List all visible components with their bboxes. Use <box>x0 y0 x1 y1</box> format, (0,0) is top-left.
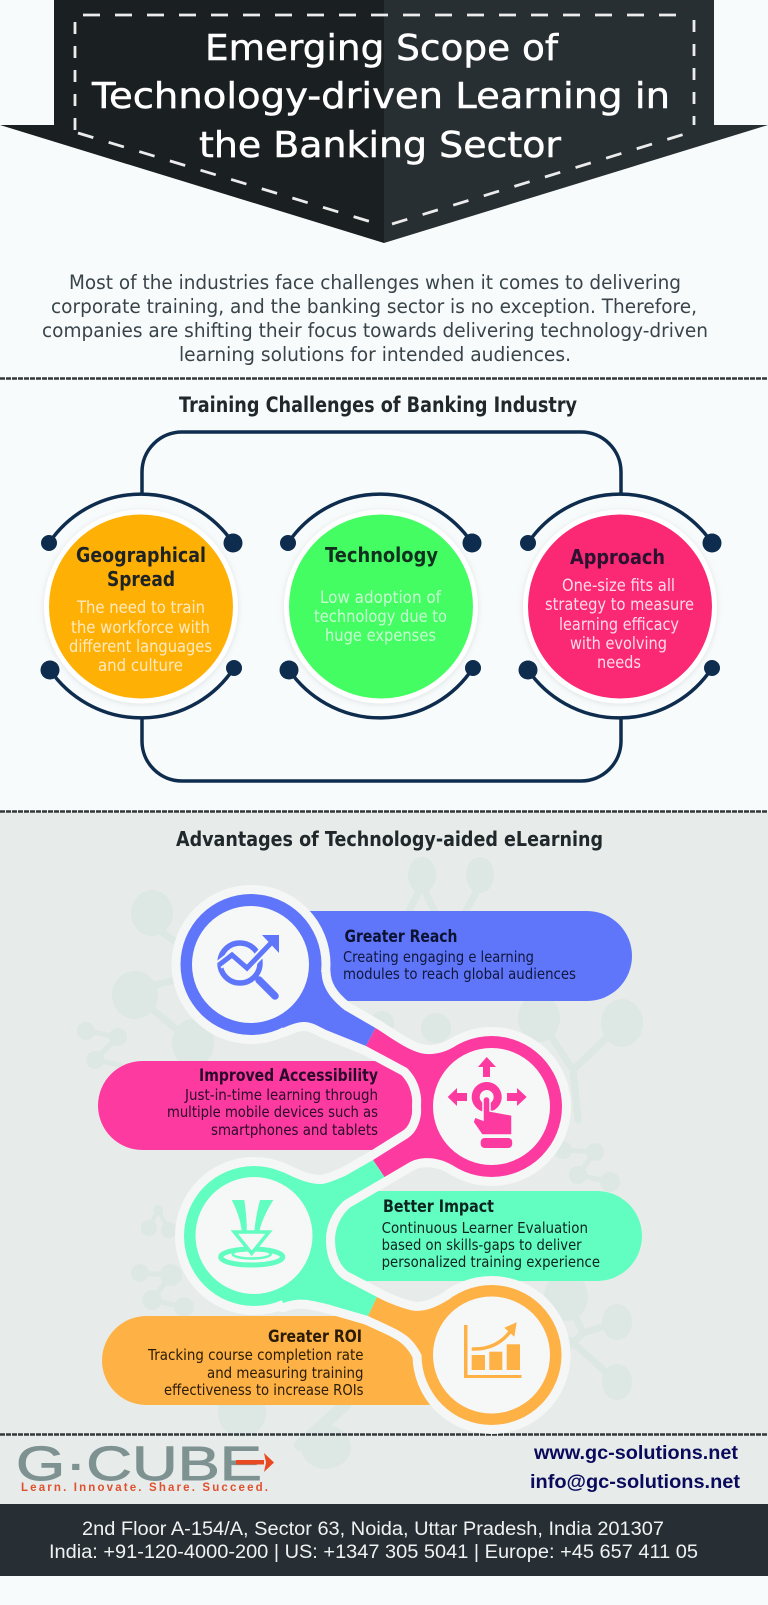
text: better impact: Better Impact <box>383 1197 494 1217</box>
text: technology: huge expenses <box>325 626 436 645</box>
text: better impact: based on skills-gaps to deliver <box>382 1236 582 1254</box>
node: greater reach <box>180 894 376 1046</box>
title text: the Banking Sector <box>199 125 561 166</box>
icon: red arrow <box>236 1453 274 1472</box>
text: geographical spread: The need to train <box>76 598 205 617</box>
text: geographical spread: and culture <box>98 656 183 675</box>
connector halo <box>180 894 562 1425</box>
text: approach: needs <box>597 653 641 672</box>
text: greater roi: and measuring training <box>207 1364 364 1382</box>
logo: G-Cube: G·CUBE <box>16 1438 262 1491</box>
text: greater reach <box>343 927 576 983</box>
advantage pills <box>98 911 642 1405</box>
text: approach: One-size fits all <box>562 576 675 595</box>
heading: training challenges: Training Challenges of Banking Industry <box>179 393 577 417</box>
panel: advantages background <box>0 812 768 1504</box>
text: approach: learning efficacy <box>559 615 679 634</box>
icon: arrow hitting target <box>221 1200 283 1265</box>
footer band <box>0 1504 768 1576</box>
title text <box>91 28 670 166</box>
text: improved accessibility: Improved Accessibility <box>199 1066 378 1086</box>
text: approach: Approach <box>570 545 665 569</box>
text: improved accessibility: multiple mobile devices such as <box>167 1103 378 1121</box>
node: improved accessibility <box>366 1028 562 1177</box>
icon: bar chart with arrow <box>464 1322 522 1378</box>
text: better impact: Continuous Learner Evaluation <box>382 1219 588 1237</box>
logo tagline: Learn. Innovate. Share. Succeed. <box>21 1482 268 1494</box>
text: greater reach: Greater Reach <box>344 927 458 947</box>
intro paragraph: Most of the industries face challenges when it comes to delivering <box>69 271 681 294</box>
title text: Technology-driven Learning in <box>91 76 670 117</box>
text: improved accessibility: Just-in-time learning through <box>184 1086 378 1104</box>
text: greater reach: Creating engaging e learning <box>343 948 534 966</box>
intro paragraph: learning solutions for intended audiences. <box>179 343 571 366</box>
text: approach: strategy to measure <box>545 595 694 614</box>
icon: magnifier with rising arrow <box>219 935 279 996</box>
title banner <box>0 0 768 243</box>
text: geographical spread <box>69 543 212 675</box>
footer address: India: +91-120-4000-200 | US: +1347 305 5041 | Europe: +45 657 411 05 <box>49 1542 698 1563</box>
node: better impact <box>184 1160 384 1316</box>
panel: geographical spread <box>40 494 242 718</box>
text: improved accessibility: smartphones and tablets <box>211 1121 378 1139</box>
text: better impact: personalized training experience <box>382 1253 600 1271</box>
intro paragraph <box>42 271 708 366</box>
text: technology: Technology <box>325 543 438 567</box>
text: technology <box>314 543 447 645</box>
panel: approach <box>518 494 722 718</box>
text: greater roi <box>147 1327 364 1399</box>
text: better impact <box>382 1197 600 1271</box>
text: technology: technology due to <box>314 607 447 626</box>
text: improved accessibility <box>167 1066 378 1139</box>
challenge connector lines <box>142 432 621 781</box>
footer address: 2nd Floor A-154/A, Sector 63, Noida, Uttar Pradesh, India 201307 <box>82 1519 664 1540</box>
intro paragraph: corporate training, and the banking sector is no exception. Therefore, <box>51 295 697 318</box>
text: greater roi: Tracking course completion rate <box>147 1346 364 1364</box>
footer address <box>49 1519 698 1563</box>
icon: touch gesture with arrows <box>448 1057 527 1148</box>
contact links: info@gc-solutions.net <box>530 1472 741 1493</box>
text: geographical spread: the workforce with <box>71 618 210 637</box>
text: approach: with evolving <box>570 634 667 653</box>
contact links <box>530 1443 741 1493</box>
intro paragraph: companies are shifting their focus towards delivering technology-driven <box>42 319 708 342</box>
text: greater reach: modules to reach global audiences <box>343 965 576 983</box>
node: greater roi <box>368 1285 562 1425</box>
text: geographical spread: different languages <box>69 637 212 656</box>
contact links: www.gc-solutions.net <box>533 1443 739 1464</box>
logo: G-Cube <box>16 1438 274 1494</box>
text: approach <box>545 545 694 672</box>
text: technology: Low adoption of <box>320 588 442 607</box>
background molecule pattern <box>77 857 643 1469</box>
panel: technology <box>280 494 482 718</box>
heading: advantages: Advantages of Technology-aided eLearning <box>176 827 603 851</box>
text: geographical spread: Spread <box>107 567 175 591</box>
text: geographical spread: Geographical <box>76 543 206 567</box>
title text: Emerging Scope of <box>205 28 559 69</box>
text: greater roi: Greater ROI <box>268 1327 362 1347</box>
text: greater roi: effectiveness to increase ROIs <box>164 1381 364 1399</box>
